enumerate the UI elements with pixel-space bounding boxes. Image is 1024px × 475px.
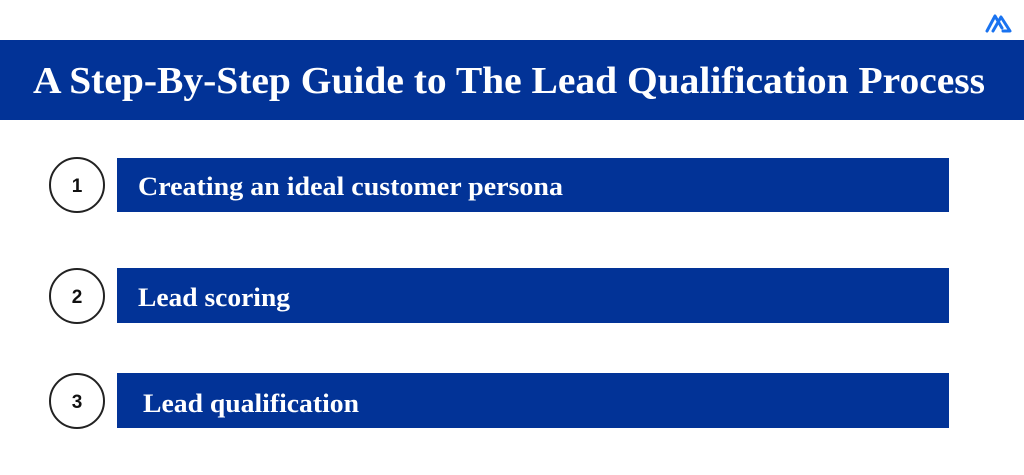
bar: lead scoring: Lead scoring bbox=[138, 283, 290, 312]
number circle 1 bbox=[50, 158, 104, 212]
number circle 1: 1 bbox=[72, 176, 83, 197]
bar: creating an ideal customer persona: Creating an ideal customer persona bbox=[138, 172, 563, 201]
title: A Step-By-Step Guide to The Lead Qualification Process bbox=[33, 60, 985, 102]
step 2 bbox=[50, 268, 949, 323]
title banner bbox=[0, 40, 1024, 120]
bar: creating an ideal customer persona bbox=[117, 158, 949, 212]
number circle 3 bbox=[50, 374, 104, 428]
number circle 3: 3 bbox=[72, 392, 82, 413]
bar: lead qualification bbox=[117, 373, 949, 428]
step 1 bbox=[50, 158, 949, 212]
bar: lead scoring bbox=[117, 268, 949, 323]
step 3 bbox=[50, 373, 949, 428]
number circle 2 bbox=[50, 269, 104, 323]
bar: lead qualification: Lead qualification bbox=[143, 389, 360, 418]
icon: logo bbox=[987, 16, 1010, 31]
number circle 2: 2 bbox=[72, 287, 82, 308]
